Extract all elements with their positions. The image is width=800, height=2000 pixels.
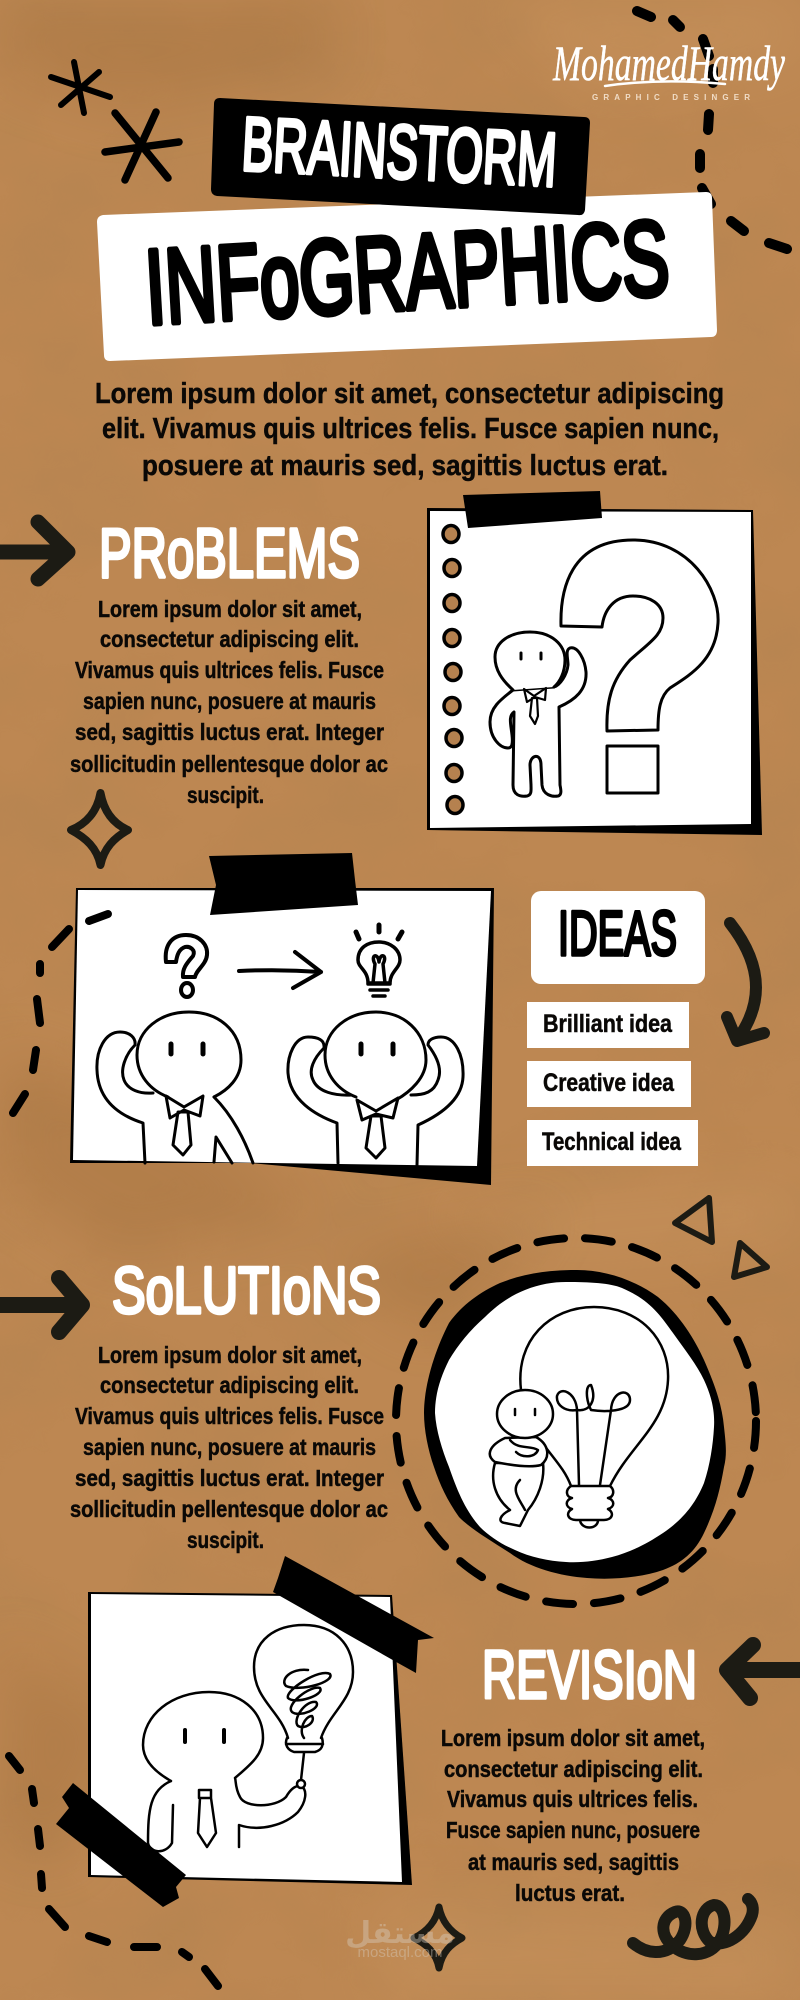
arrow: revision — [727, 1645, 800, 1698]
intro text: elit. Vivamus quis ultrices felis. Fusce sapien nunc, — [102, 413, 719, 445]
text block: problems: suscipit. — [187, 782, 264, 808]
arrow: curved down — [727, 923, 764, 1041]
arrow: problems — [0, 522, 68, 579]
text block: revision — [441, 1725, 705, 1906]
text block: revision: Fusce sapien nunc, posuere — [446, 1817, 700, 1843]
text block: revision: luctus erat. — [515, 1880, 625, 1906]
icon: small question mark — [166, 935, 207, 997]
text block: problems: sollicitudin pellentesque dolor ac — [70, 751, 388, 777]
text block: solutions: Vivamus quis ultrices felis. Fusce — [75, 1403, 384, 1429]
text block: revision: at mauris sed, sagittis — [468, 1849, 679, 1875]
logo: designer signature: GRAPHIC DESINGER — [592, 93, 750, 102]
text block: problems: sapien nunc, posuere at mauris — [83, 688, 376, 714]
decoration: left dashed path — [13, 929, 69, 1113]
decoration: dashed circle — [396, 1238, 756, 1604]
text block: solutions: sed, sagittis luctus erat. Integer — [75, 1465, 384, 1491]
figure: thinking person — [490, 632, 586, 796]
tape: bottom left — [56, 1783, 186, 1907]
watermark: mostaql: مستقل — [345, 1916, 455, 1951]
text block: solutions — [70, 1342, 388, 1553]
label: brilliant idea — [527, 1002, 689, 1048]
arrow: question leads to idea — [239, 952, 321, 988]
text block: problems: sed, sagittis luctus erat. Integer — [75, 719, 384, 745]
figure: right person — [288, 1012, 463, 1165]
label: technical idea: Technical idea — [542, 1128, 682, 1156]
text block: solutions: Lorem ipsum dolor sit amet, — [98, 1342, 362, 1368]
icon: four point star — [71, 793, 128, 865]
icon: big question mark — [561, 540, 718, 793]
panel: notebook with question mark — [427, 491, 762, 835]
text block: solutions: suscipit. — [187, 1527, 264, 1553]
decoration: top right dashed path — [637, 11, 787, 249]
panel: idea blob with person and bulb — [424, 1270, 726, 1579]
text block: solutions: sollicitudin pellentesque dolor ac — [70, 1496, 388, 1522]
icon: asterisk pair — [51, 62, 179, 180]
figure: left person — [97, 1012, 253, 1163]
heading: problems: PRoBLEMS — [99, 514, 360, 592]
title panel: brainstorm: BRAINSTORM — [240, 102, 559, 203]
heading: revision: REVISIoN — [482, 1637, 697, 1713]
intro text: posuere at mauris sed, sagittis luctus erat. — [142, 450, 668, 482]
figure: leaning person — [490, 1390, 553, 1526]
icon: triangles — [675, 1198, 767, 1277]
text block: solutions: consectetur adipiscing elit. — [100, 1372, 359, 1398]
icon: squiggle — [633, 1899, 753, 1954]
label: technical idea — [527, 1120, 698, 1166]
text block: problems — [70, 596, 388, 808]
text block: problems: Lorem ipsum dolor sit amet, — [98, 596, 362, 622]
label: creative idea: Creative idea — [543, 1069, 675, 1097]
text block: revision: Lorem ipsum dolor sit amet, — [441, 1725, 705, 1751]
icon: large bulb — [520, 1307, 668, 1528]
panel: ideas heading — [531, 891, 705, 984]
label: brilliant idea: Brilliant idea — [543, 1010, 673, 1038]
tape: notebook — [463, 491, 602, 528]
panel: ideas heading: IDEAS — [558, 899, 677, 969]
panel: revision illustration — [56, 1556, 434, 1907]
tape: top right — [273, 1556, 434, 1673]
text block: problems: consectetur adipiscing elit. — [100, 626, 359, 652]
text block: problems: Vivamus quis ultrices felis. Fusce — [75, 657, 384, 683]
arrow: solutions — [0, 1278, 82, 1332]
icon: small light bulb — [356, 925, 402, 996]
intro text — [95, 378, 724, 482]
tape: ideas panel — [209, 853, 358, 915]
label: creative idea — [527, 1061, 691, 1107]
text block: revision: Vivamus quis ultrices felis. — [447, 1786, 698, 1812]
watermark: mostaql: mostaql.com — [357, 1944, 443, 1961]
panel: question to idea — [70, 853, 494, 1185]
heading: solutions: SoLUTIoNS — [112, 1253, 381, 1327]
icon: bottom four point star — [414, 1907, 462, 1968]
figure: person holding bulb — [143, 1692, 305, 1851]
icon: bulb with coil — [254, 1625, 353, 1780]
notebook holes — [443, 526, 463, 814]
intro text: Lorem ipsum dolor sit amet, consectetur adipiscing — [95, 378, 724, 410]
text block: solutions: sapien nunc, posuere at mauris — [83, 1434, 376, 1460]
title panel: brainstorm — [211, 98, 590, 215]
decoration: bottom left dashed path — [9, 1756, 218, 1986]
text block: revision: consectetur adipiscing elit. — [444, 1756, 703, 1782]
